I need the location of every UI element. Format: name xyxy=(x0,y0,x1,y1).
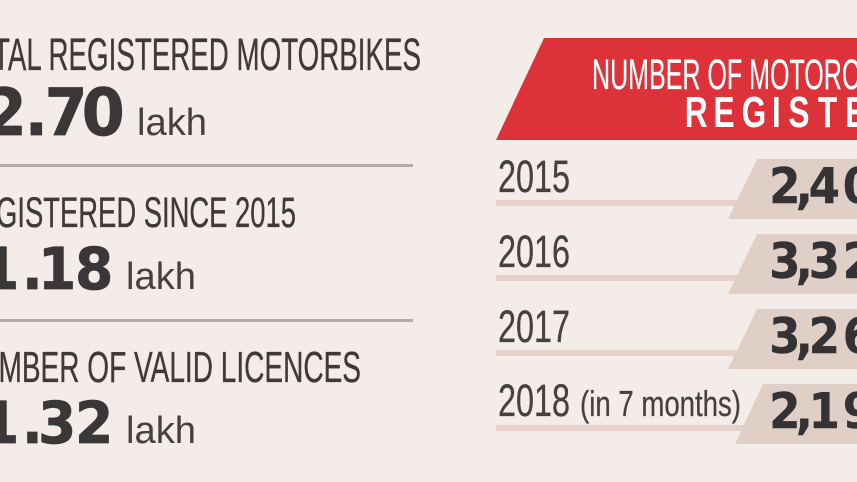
value tab xyxy=(728,234,857,294)
stat: registered since 2015 xyxy=(0,189,296,303)
red banner xyxy=(496,38,857,140)
row rule xyxy=(496,350,746,356)
year note: (in 7 months) xyxy=(580,383,741,424)
row rule xyxy=(496,200,746,206)
value tab xyxy=(735,384,857,444)
row: 2018 xyxy=(496,375,857,444)
row: 2016 xyxy=(496,226,857,294)
row: 2017 xyxy=(496,301,857,369)
year label: 2016 xyxy=(498,226,570,277)
unit: lakh: lakh xyxy=(126,256,196,298)
row rule xyxy=(496,425,752,431)
year label: 2018 xyxy=(498,375,570,426)
stat: number of valid licences xyxy=(0,343,361,457)
value tab xyxy=(728,309,857,369)
panel: yearly registrations header xyxy=(496,38,857,140)
unit: lakh: lakh xyxy=(137,102,207,144)
value tab xyxy=(728,159,857,219)
stat: total registered motorbikes xyxy=(0,29,421,150)
row: 2015 xyxy=(496,151,857,219)
unit: lakh: lakh xyxy=(126,410,196,452)
row rule xyxy=(496,275,746,281)
year label: 2015 xyxy=(498,151,570,202)
year label: 2017 xyxy=(498,301,570,352)
